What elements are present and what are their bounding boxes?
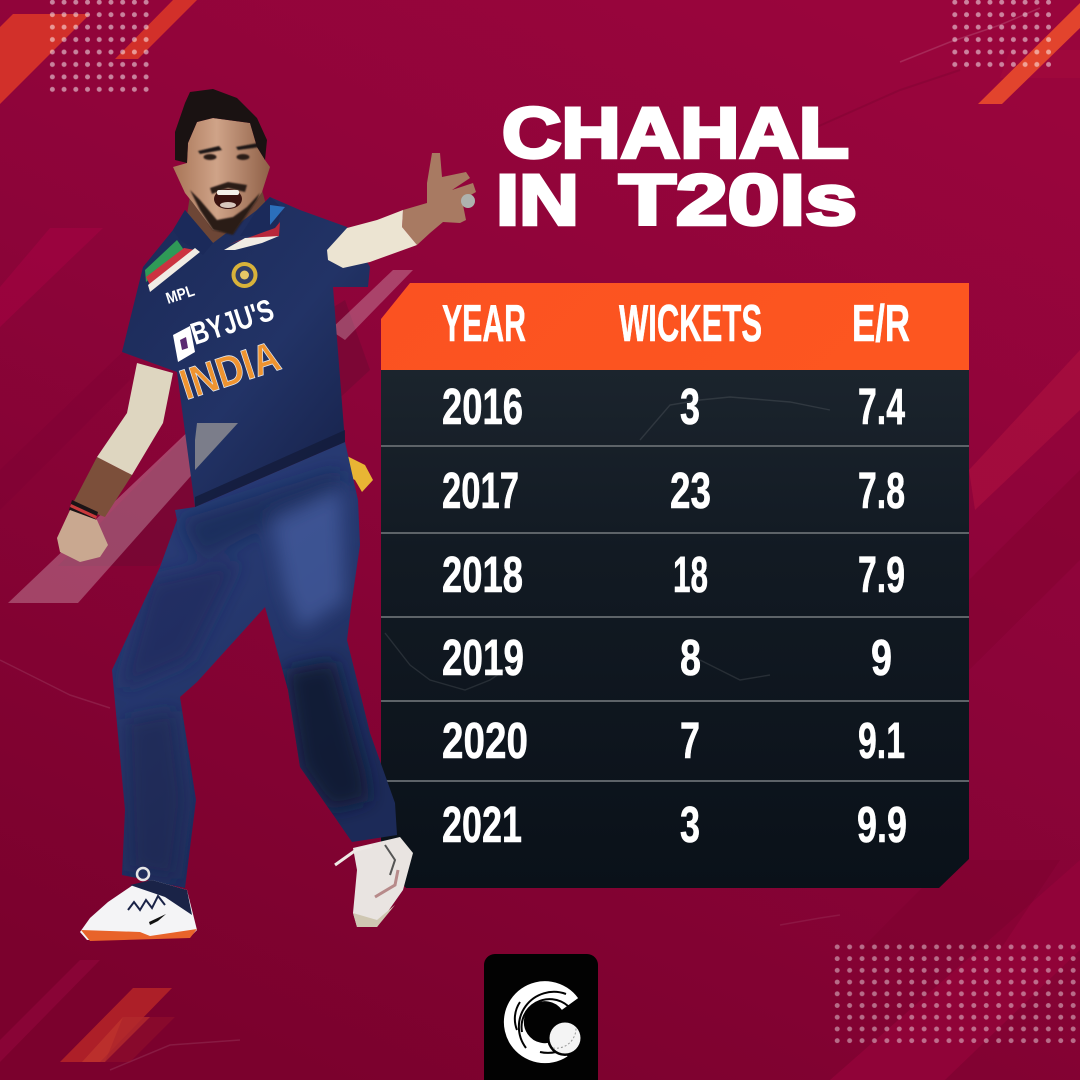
hair [175,89,267,163]
right shoe [335,837,413,927]
dot grid: bottom right [831,941,1079,1046]
header labels: WICKETS [619,295,762,353]
row 2016: 2016 [442,378,523,435]
ring [461,194,475,208]
row 2021: 3 [680,796,700,853]
row 2017: 7.8 [858,462,905,519]
logo ring cut lines [515,992,568,1053]
row 2016: 7.4 [858,378,905,435]
row 2021: 9.9 [857,796,907,853]
right sleeve [327,210,417,268]
row 2017 [442,462,905,519]
trousers [112,442,397,888]
row 2016 [442,378,905,435]
India crest badge [232,262,258,288]
row 2018: 7.9 [858,546,905,603]
logo cricket ball [547,1020,583,1056]
row 2019: 9 [871,629,892,686]
row 2017: 23 [670,462,711,519]
logo badge [484,954,598,1080]
left shoe [80,868,197,941]
diagonal stripes behind player [8,270,413,603]
left sleeve [97,363,173,475]
sponsor: MPL: MPL [164,283,197,308]
sponsor: INDIA: INDIA [174,332,286,410]
title [496,94,857,240]
table scratches [385,397,830,690]
row 2019: 8 [680,629,701,686]
decorative stripes: top left [0,0,197,104]
neck [186,190,268,248]
dot grid: top left [46,0,152,96]
sponsor: BYJU'S [173,292,278,362]
title line 2: T20Is: T20Is [619,162,857,240]
header labels: YEAR [442,295,526,353]
row 2017: 2017 [442,462,519,519]
row 2019 [442,629,892,686]
row 2021 [442,796,907,853]
logo ring [514,991,570,1053]
jersey waist shadow [195,430,345,507]
stats table [381,283,969,888]
row 2019: 2019 [442,629,524,686]
row 2021: 2021 [442,796,522,853]
right shoulder tricolor stripes [224,205,285,250]
jersey [122,197,370,507]
row 2018: 2018 [442,546,523,603]
dot grid: top right [949,0,1054,73]
face [173,118,270,233]
mouth [214,189,242,209]
left fist [57,510,108,562]
decorative stripe: top right [978,3,1080,104]
collar [173,197,282,255]
sponsor: BYJU'S: BYJU'S [186,292,278,352]
row 2020 [442,712,905,769]
row 2016: 3 [680,378,700,435]
left shoulder tricolor stripes [145,240,200,292]
header labels [442,295,910,353]
table header bar [381,283,969,370]
right forearm and hand [402,153,476,245]
row 2018: 18 [673,546,708,603]
header labels: E/R [852,295,910,353]
row 2020: 7 [680,712,700,769]
left forearm [72,457,132,517]
table body [381,370,969,888]
wrist band [69,500,98,522]
yellow thigh pad [345,455,373,492]
row 2018 [442,546,905,603]
player figure [57,89,476,941]
decorative stripes: bottom left [60,988,175,1062]
row divider lines [381,445,969,782]
beard [190,190,260,235]
stripe overlay on jersey [195,423,238,470]
title line 2: IN: IN [496,162,579,240]
title line 1: CHAHAL [502,94,849,174]
row 2020: 2020 [442,712,528,769]
trouser shading [120,470,370,880]
eyes and brows [198,143,260,160]
moustache [210,182,247,194]
row 2020: 9.1 [858,712,905,769]
